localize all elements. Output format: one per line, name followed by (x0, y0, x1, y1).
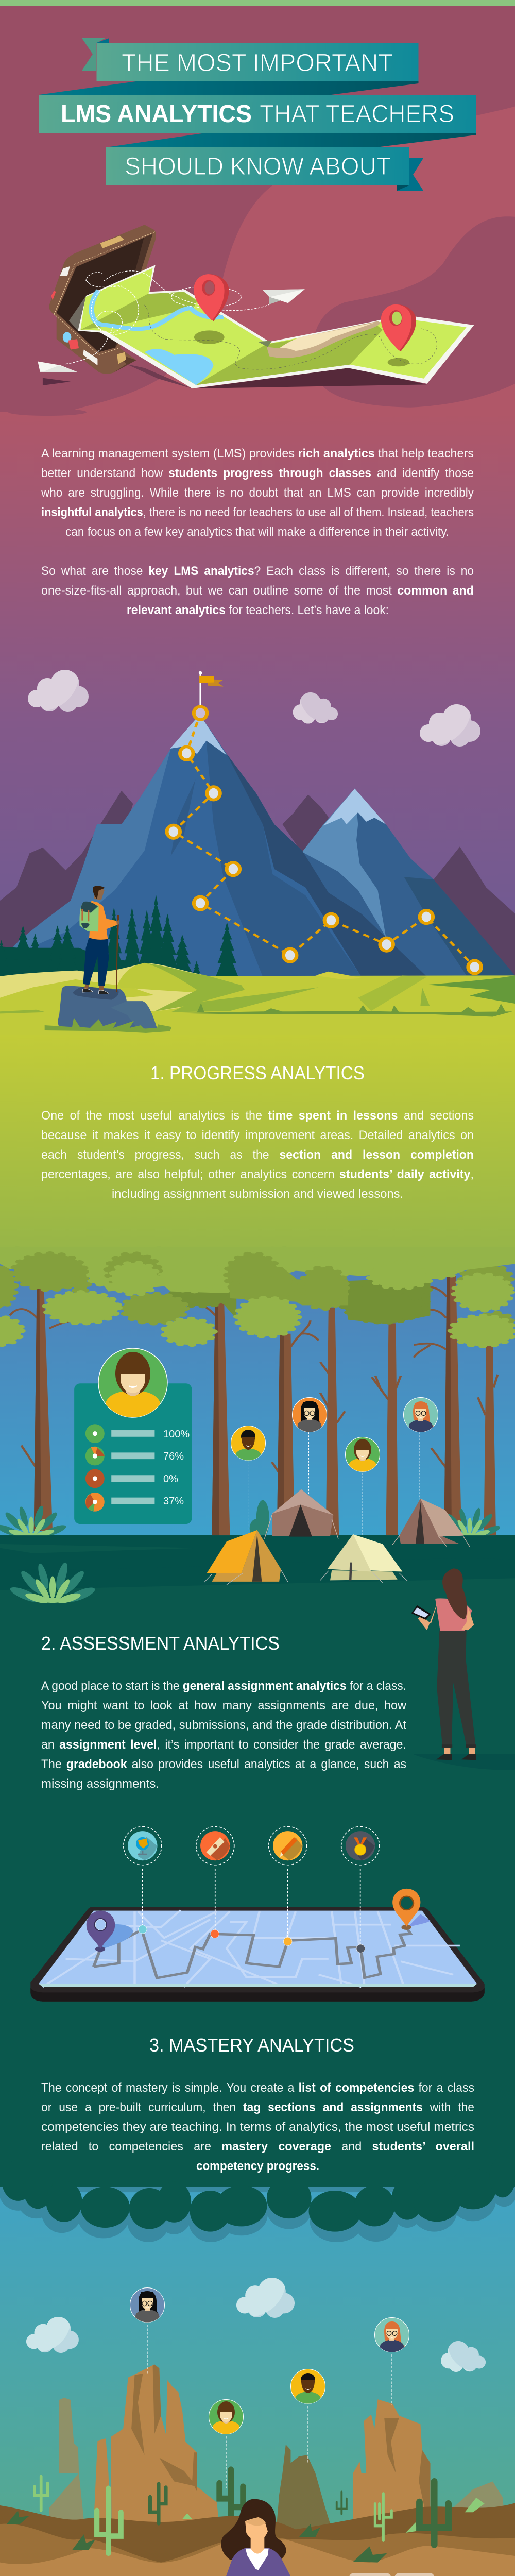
tree canopy (0, 1247, 515, 1346)
illustration: suitcase and map (38, 225, 474, 388)
pie: 100% (85, 1424, 105, 1443)
map shadow (127, 364, 427, 388)
body (218, 2548, 297, 2576)
front dune (0, 2539, 515, 2576)
avatar: black hair (293, 1397, 327, 1432)
text block: intro paragraph 2: So what are those key LMS analytics? Each class is different, so there is no (41, 564, 474, 578)
tree trunks (10, 1276, 497, 1536)
title line 2 (61, 100, 454, 128)
text block: intro paragraph 1: A learning management system (LMS) provides rich analytics that help teachers (41, 447, 474, 461)
rock grass (45, 1018, 171, 1033)
pie: 76% (85, 1447, 105, 1465)
cloud front (0, 2061, 515, 2232)
label: percentages: 37% (163, 1496, 184, 1507)
title line 2: LMS ANALYTICS (61, 100, 252, 128)
text block: intro paragraph 1 (41, 447, 474, 539)
icon: summit flag (199, 671, 224, 706)
icon: globe (128, 1831, 158, 1860)
panel: progress ring (394, 2573, 435, 2576)
back purple mountains (0, 791, 515, 975)
text block: mastery analytics: related to competencies are mastery coverage and students’ overall (41, 2140, 474, 2154)
label: percentages: 0% (163, 1473, 178, 1485)
illustration: camp ground (0, 1383, 515, 1605)
white dashed flight lines (66, 271, 269, 364)
label: percentages: 76% (163, 1451, 184, 1462)
text block: intro paragraph 1: who are struggling. While there is no doubt that an LMS can provide incredibly (41, 486, 474, 500)
avatar: man (231, 1426, 266, 1461)
meadow hills (0, 963, 515, 1035)
tent: yellow (204, 1530, 288, 1585)
background: forest sky (0, 1260, 515, 1538)
far cacti (35, 2469, 347, 2528)
text block: intro paragraph 2 (41, 564, 474, 617)
title line 3: SHOULD KNOW ABOUT (125, 153, 391, 180)
icon: suitcase (49, 225, 156, 374)
trail waypoints (167, 706, 481, 974)
illustration: assessment tablet map (30, 1826, 485, 2002)
text block: progress analytics (41, 1109, 474, 1201)
ground (0, 1535, 515, 1590)
text block: mastery analytics: The concept of mastery is simple. You create a list of competencies for a class (41, 2081, 474, 2095)
text block: mastery analytics: competencies they are teaching. In terms of analytics, the most useful metrics (41, 2120, 474, 2134)
text block: mastery analytics: competency progress. (196, 2159, 319, 2173)
heading: mastery: 3. MASTERY ANALYTICS (149, 2035, 354, 2056)
text block: assessment analytics: an assignment level, it’s important to consider the grade average. (41, 1738, 406, 1752)
dashed connector lines (147, 2325, 391, 2488)
icon: paper plane left (38, 362, 77, 385)
icon: location pin 1 (194, 274, 229, 321)
text block: mastery analytics: or use a pre-built curriculum, then tag sections and assignments with the (41, 2100, 474, 2114)
background: desert sky (0, 2164, 515, 2535)
small snowy mountain (302, 789, 515, 977)
avatar: desert man (290, 2369, 325, 2404)
rock (58, 986, 157, 1029)
text block: assessment analytics: many need to be graded, submissions, and the grade distribution. At (41, 1718, 406, 1732)
text block: progress analytics: each student’s progress, such as the section and lesson completion (41, 1148, 474, 1162)
icon: paper plane right (263, 289, 305, 304)
text block: progress analytics: One of the most useful analytics is the time spent in lessons and sections (41, 1109, 474, 1123)
text block: progress analytics: because it makes it easy to identify improvement areas. Detailed analytics on (41, 1128, 474, 1142)
face (251, 2536, 264, 2554)
illustration: woman with laptop (174, 2499, 338, 2576)
route stops (139, 1925, 365, 1953)
icon: location pin 2 (381, 304, 416, 351)
icon: diploma (200, 1831, 230, 1860)
text block: intro paragraph 1: can focus on a few key analytics that will make a difference in their activity. (65, 525, 449, 539)
route line (94, 1927, 410, 1978)
hair (221, 2499, 286, 2560)
label: percentages (163, 1429, 190, 1507)
cloud: desert centre (212, 2243, 295, 2318)
cloud: dusk centre (293, 666, 357, 724)
illustration: rock and hiker (45, 886, 171, 1033)
cloud: dusk right (394, 668, 480, 747)
text block: intro paragraph 2: relevant analytics for teachers. Let’s have a look: (127, 603, 389, 617)
text block: progress analytics: percentages, are also helpful; other analytics concern students’ daily activity, (41, 1167, 474, 1181)
text block: assessment analytics: You might want to look at how many assignments are due, how (41, 1699, 407, 1713)
back dune (0, 2503, 515, 2576)
illustration: mountains and hiking trail (0, 671, 515, 1035)
pie: 37% (85, 1493, 105, 1512)
background: meadow gradient (0, 974, 515, 1262)
tablet (30, 1907, 485, 2002)
avatar: brown hair (345, 1437, 380, 1472)
background: dark green ground (0, 1535, 515, 2184)
text block: mastery analytics (41, 2081, 474, 2173)
big mountain (0, 715, 427, 977)
pie: 0% (85, 1469, 105, 1488)
text block: assessment analytics: A good place to start is the general assignment analytics for a class. (41, 1679, 406, 1693)
panel: loading bars (349, 2573, 391, 2576)
text block: intro paragraph 1: better understand how students progress through classes and identify those (41, 466, 474, 480)
avatar: desert red hair (375, 2317, 409, 2352)
heading: progress: 1. PROGRESS ANALYTICS (150, 1062, 365, 1083)
icon: folded map (69, 265, 474, 388)
avatar: desert black hair (130, 2287, 165, 2323)
tent: cream (320, 1534, 407, 1583)
middle dune (0, 2524, 515, 2576)
heading: assessment: 2. ASSESSMENT ANALYTICS (41, 1633, 280, 1654)
icon: woman with tablet (411, 1568, 515, 1770)
title ribbon (39, 38, 476, 191)
text block: assessment analytics (41, 1679, 407, 1791)
title line 1: THE MOST IMPORTANT (122, 49, 393, 77)
background: top strip (0, 0, 515, 6)
background: header waves (0, 6, 515, 418)
text block: progress analytics: including assignment submission and viewed lessons. (112, 1187, 403, 1201)
cloud: desert right (441, 2315, 505, 2372)
cloud: desert left (4, 2286, 79, 2353)
dashed drop lines (248, 1432, 420, 1536)
background: purple dusk sky (0, 412, 515, 979)
icon: hiker (79, 886, 119, 994)
avatar: desert brown hair (209, 2400, 243, 2434)
near cacti (97, 2482, 449, 2553)
foreground bush (9, 1561, 96, 1605)
panel: student card (74, 1383, 192, 1524)
icon: medal (346, 1831, 375, 1860)
title line 2: THAT TEACHERS (260, 100, 454, 128)
icon rings and connector lines (124, 1826, 380, 1945)
text block: assessment analytics: The gradebook also provides useful analytics at a glance, such as (41, 1757, 406, 1771)
background bushes (0, 1505, 67, 1539)
pine forest (0, 895, 238, 985)
cloud shadow (0, 2165, 515, 2242)
text block: assessment analytics: missing assignments. (41, 1777, 159, 1791)
illustration: desert rocks (49, 2364, 506, 2560)
illustration: forest camp (0, 1247, 515, 1536)
cloud: dusk left (2, 634, 89, 712)
illustration: desert dunes and cacti (0, 2469, 515, 2576)
tent: brown right (392, 1499, 470, 1547)
panel: reports dashboard (287, 2573, 435, 2576)
agave plants (7, 2511, 387, 2563)
label: percentages: 100% (163, 1429, 190, 1440)
icon: orange pin (392, 1889, 420, 1930)
avatar: red hair (404, 1397, 438, 1432)
avatar: student card (98, 1348, 167, 1418)
illustration: cloud edge (0, 2061, 515, 2242)
text block: intro paragraph 1: insightful analytics, there is no need for teachers to use all of them. Instead, teachers (41, 505, 474, 519)
pin shadows (100, 1914, 431, 1950)
icon: purple pin (87, 1911, 115, 1952)
text block: intro paragraph 2: one-size-fits-all approach, but we can outline some of the most common and (41, 584, 474, 598)
dashed trail (174, 713, 475, 967)
icon: pencil (273, 1831, 302, 1860)
tent: brown back (264, 1489, 338, 1539)
